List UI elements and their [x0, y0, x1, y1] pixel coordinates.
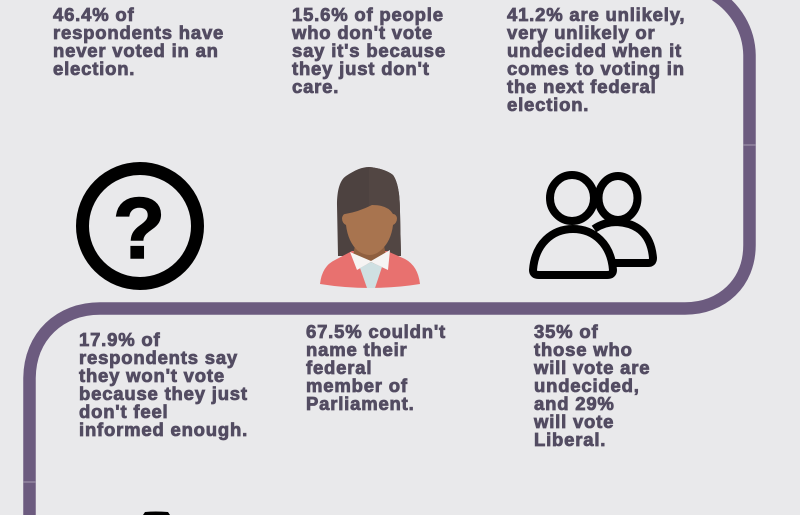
- icon: two people: [533, 175, 653, 275]
- icon: question mark: [82, 168, 198, 284]
- text: don't care: 15.6% of people who don't vote say it's because they just don't care.: [292, 4, 446, 97]
- text: never voted: 46.4% of respondents have never voted in an election.: [53, 4, 224, 79]
- text: member of Parliament: 67.5% couldn't name their federal member of Parliament.: [306, 321, 446, 414]
- text: undecided voters: 35% of those who will vote are undecided, and 29% will vote Liberal.: [534, 321, 650, 450]
- icon: woman avatar: [320, 167, 420, 288]
- text: not informed: 17.9% of respondents say they won't vote because they just don't feel informed enough.: [79, 329, 248, 440]
- icon: question mark: ?: [113, 181, 165, 277]
- text: unlikely to vote: 41.2% are unlikely, very unlikely or undecided when it comes to voting in the next federal election.: [507, 4, 685, 115]
- icon: partial figure at bottom edge: [143, 512, 170, 515]
